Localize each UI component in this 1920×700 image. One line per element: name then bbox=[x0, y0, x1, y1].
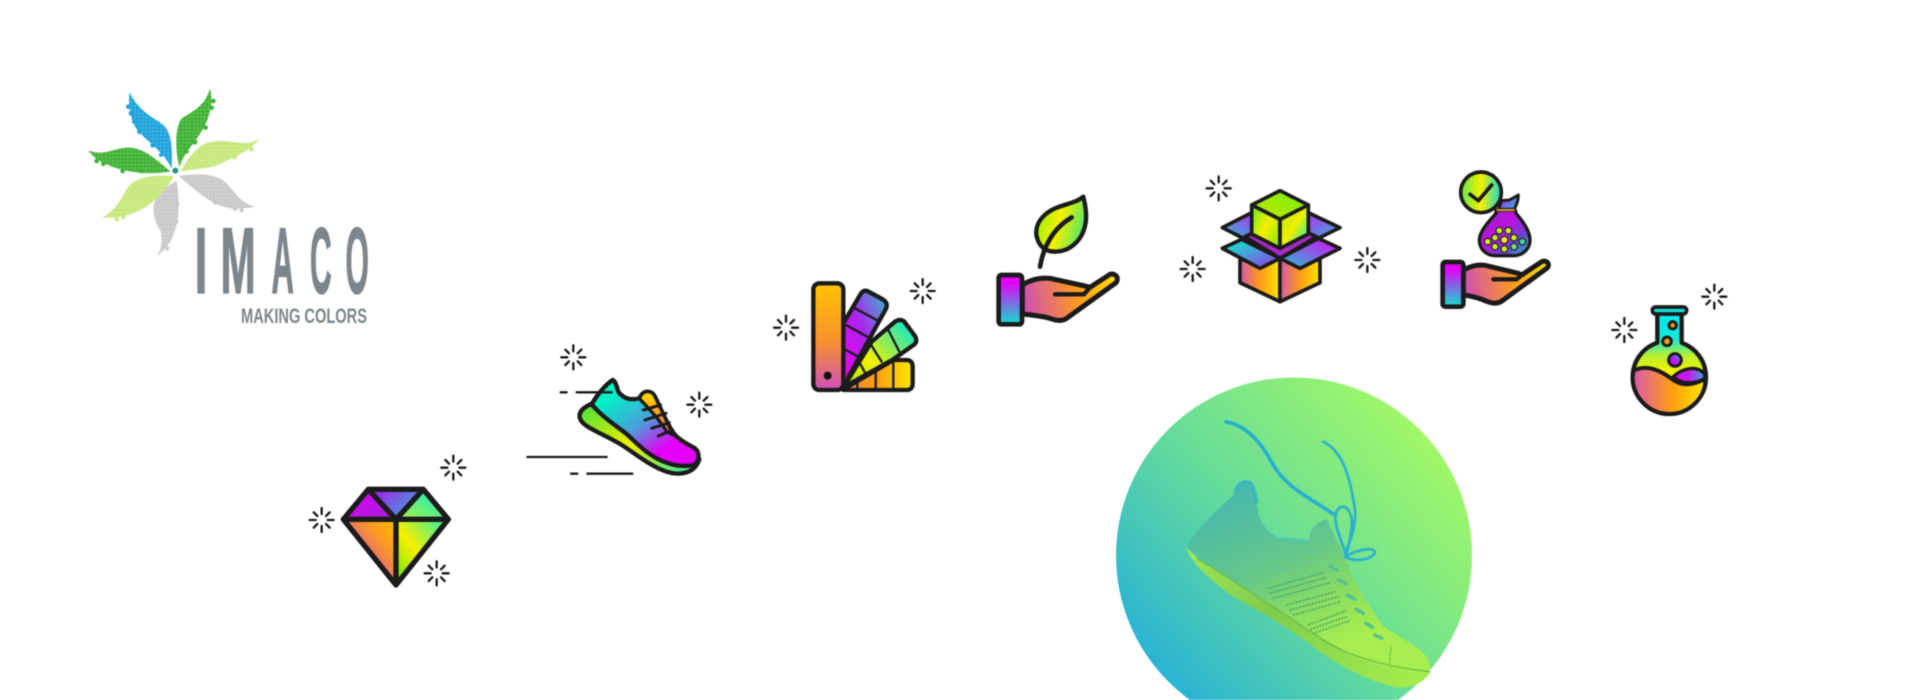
diamond outline bbox=[343, 489, 448, 585]
gradient disc bbox=[1116, 378, 1472, 700]
green gradient disc with sneaker bbox=[1116, 378, 1472, 700]
diamond facets bbox=[343, 489, 448, 585]
cuff bbox=[999, 275, 1022, 324]
bag tie bbox=[1497, 207, 1515, 212]
shoe tongue and laces bbox=[639, 392, 673, 436]
icon: open box with cube bbox=[1181, 176, 1379, 302]
flask lip bbox=[1652, 307, 1687, 314]
petal: blue bbox=[126, 93, 172, 168]
petal: green left bbox=[88, 148, 171, 173]
icon: colour swatch fan bbox=[774, 279, 935, 390]
logo flower mark bbox=[88, 88, 259, 257]
perforation stripes bbox=[1268, 573, 1350, 633]
petal: grey bottom bbox=[154, 180, 179, 257]
bubbles bbox=[1663, 322, 1681, 366]
sneaker sole bbox=[1186, 547, 1431, 687]
speed lines bbox=[527, 392, 632, 474]
hand bbox=[1463, 261, 1548, 303]
leaf bbox=[1036, 197, 1086, 252]
icon: diamond bbox=[310, 456, 465, 585]
shoelace long bbox=[1226, 422, 1333, 514]
box body bbox=[1240, 258, 1320, 302]
logo wordmark IMACO: I bbox=[194, 208, 208, 313]
icon: running shoe bbox=[527, 345, 711, 474]
petal: light green right bbox=[181, 139, 259, 172]
fan blade bottom bbox=[843, 360, 913, 390]
cuff bbox=[1443, 262, 1463, 307]
sparkles bbox=[561, 345, 711, 417]
check badge bbox=[1461, 172, 1501, 213]
sneaker collar inside bbox=[1262, 523, 1314, 542]
box inside bbox=[1245, 220, 1317, 258]
thumb line bbox=[1493, 275, 1522, 279]
sneaker photo bbox=[1186, 422, 1431, 687]
sneaker upper bbox=[1186, 481, 1430, 682]
sneaker laces on upper bbox=[1330, 567, 1382, 638]
fan blade green bbox=[843, 320, 916, 387]
shoe sole bbox=[580, 404, 699, 474]
toe cap seam bbox=[1390, 647, 1392, 668]
pigment beads bbox=[1484, 227, 1526, 252]
liquid upper wave bbox=[1673, 369, 1705, 383]
logo wordmark IMACO: M bbox=[220, 209, 256, 314]
petal: green upper bbox=[176, 88, 216, 167]
sparkles bbox=[774, 279, 935, 340]
fan blade purple bbox=[843, 291, 887, 385]
petal: grey right bbox=[178, 174, 255, 212]
petal: light green left bbox=[103, 176, 174, 221]
hand bbox=[1022, 274, 1117, 320]
logo tagline: MAKING COLORS bbox=[241, 305, 367, 328]
leaf stem bbox=[1040, 217, 1072, 267]
shoe upper bbox=[592, 380, 699, 466]
liquid lower bbox=[1633, 368, 1705, 414]
sparkles bbox=[1181, 176, 1379, 281]
bag neck bbox=[1498, 195, 1518, 209]
icon: hand holding leaf bbox=[999, 197, 1117, 324]
sparkles bbox=[1612, 285, 1726, 342]
logo wordmark IMACO: O bbox=[346, 208, 369, 313]
bag body bbox=[1479, 210, 1530, 256]
logo: IMACO making colors bbox=[88, 88, 369, 328]
icon: hand holding pigment bag bbox=[1443, 172, 1548, 307]
heel tab bbox=[1235, 482, 1257, 503]
back flaps bbox=[1222, 213, 1340, 240]
main swatch bar bbox=[813, 283, 843, 390]
logo wordmark IMACO bbox=[194, 208, 369, 314]
cube bbox=[1252, 191, 1308, 248]
sparkles bbox=[310, 456, 465, 585]
icon: chemistry flask bbox=[1612, 285, 1726, 414]
logo wordmark IMACO: A bbox=[272, 208, 294, 313]
flower centre bbox=[172, 168, 178, 174]
swatch hole bbox=[824, 372, 832, 380]
shoelace right and bow bbox=[1323, 442, 1375, 560]
swatch divider lines bbox=[846, 308, 899, 389]
sole stitch line bbox=[1197, 558, 1430, 672]
flask glass bbox=[1633, 313, 1706, 414]
thumb line bbox=[1055, 287, 1090, 294]
front flaps bbox=[1222, 238, 1340, 268]
logo wordmark IMACO: C bbox=[310, 208, 332, 313]
